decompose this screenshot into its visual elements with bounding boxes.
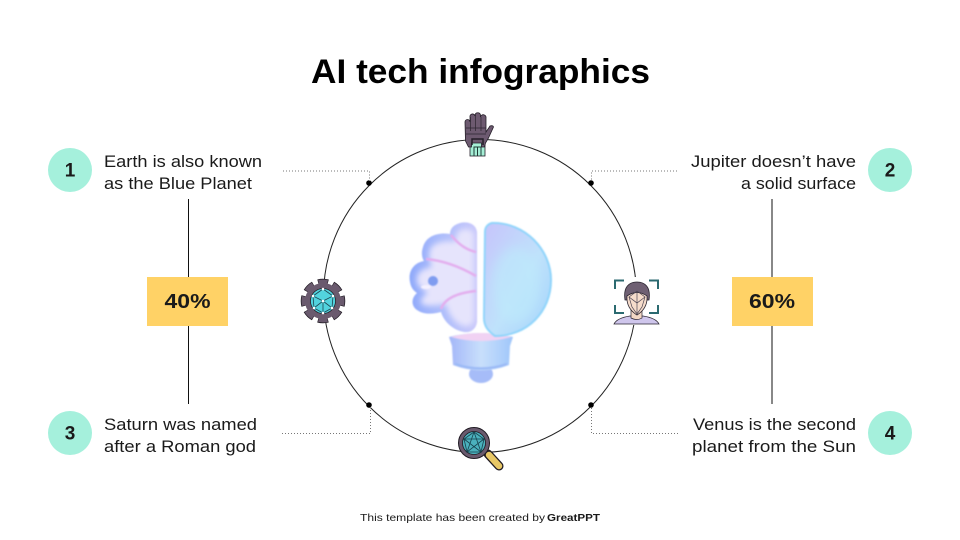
item 3: Saturn was named <box>104 415 257 434</box>
item 2 <box>691 148 912 193</box>
item 4: Venus is the second <box>693 415 856 434</box>
dotted connector: top left <box>283 171 370 181</box>
item 2: a solid surface <box>741 174 856 193</box>
footer credit: This template has been created by <box>360 512 546 524</box>
item 2: Jupiter doesn’t have <box>691 152 856 171</box>
icon: robot hand <box>465 113 494 156</box>
item 4: 4 <box>885 424 896 444</box>
icon: face scan <box>612 277 660 325</box>
dotted connector: bottom right <box>592 407 678 434</box>
stat box: 60% <box>732 277 813 326</box>
dotted connector: bottom left <box>282 407 370 434</box>
item 4 <box>692 411 912 456</box>
item 1: Earth is also known <box>104 152 262 171</box>
item 3: 3 <box>65 424 75 444</box>
item 1 <box>48 148 262 193</box>
bulb right half <box>484 223 551 336</box>
item 2: 2 <box>885 160 895 182</box>
bulb base <box>449 333 513 383</box>
icon: magnifier with network <box>458 428 499 466</box>
title: AI tech infographics <box>311 53 650 91</box>
footer credit: GreatPPT <box>547 512 601 524</box>
item 1: as the Blue Planet <box>104 174 252 193</box>
icon: brain light bulb <box>410 222 551 383</box>
item 1: 1 <box>65 160 76 182</box>
central ring <box>324 140 636 452</box>
stat box: 40% <box>147 277 228 326</box>
footer credit <box>360 512 601 524</box>
icon: gear with neural network <box>304 282 342 320</box>
item 3: after a Roman god <box>104 437 256 456</box>
brain left half <box>410 222 477 332</box>
vertical line: right <box>771 199 773 404</box>
dotted connector: top right <box>592 171 677 181</box>
item 4: planet from the Sun <box>692 437 856 456</box>
vertical line: left <box>188 199 190 404</box>
stat box: 40%: 40% <box>164 291 211 313</box>
stat box: 60%: 60% <box>749 291 795 313</box>
item 3 <box>48 411 257 456</box>
